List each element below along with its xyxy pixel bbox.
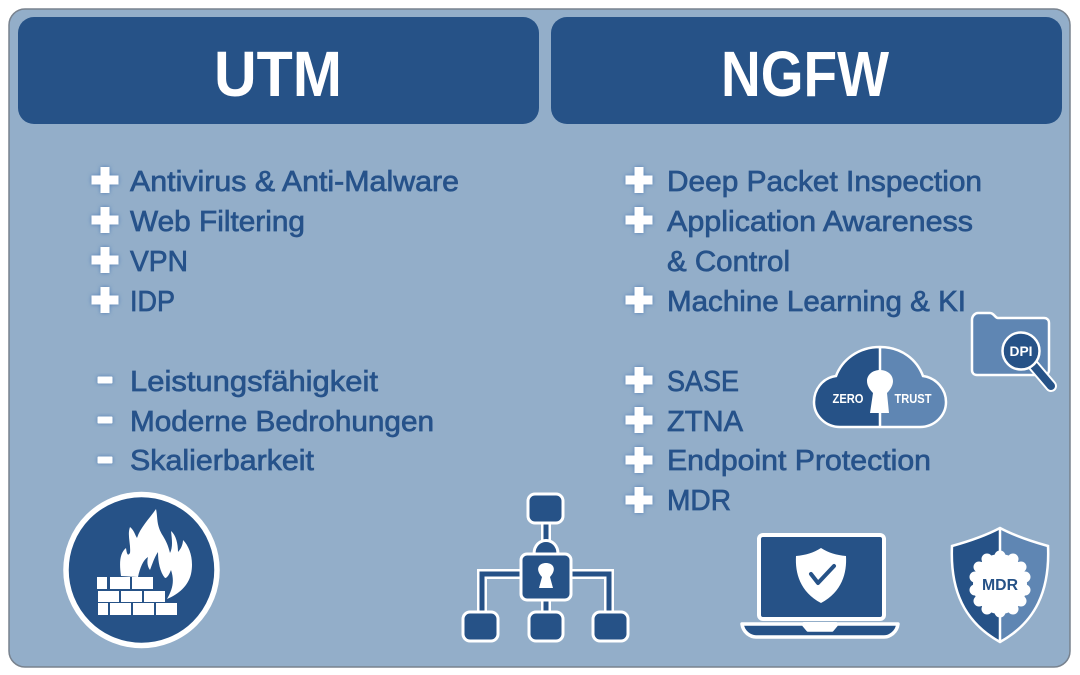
heading: UTM (18, 17, 539, 124)
list: UTM disadvantages: Skalierbarkeit (130, 445, 314, 477)
list: UTM disadvantages: Leistungsfähigkeit (130, 366, 378, 398)
icon: firewall (66, 494, 217, 646)
list: NGFW core features (626, 166, 982, 318)
list: UTM advantages: IDP (130, 286, 175, 318)
icon: MDR shield (952, 528, 1048, 642)
list: NGFW extended features: Endpoint Protection (667, 445, 931, 477)
list: NGFW extended features: MDR (667, 485, 731, 517)
list: NGFW extended features (626, 366, 931, 517)
list: NGFW core features: Machine Learning & KI (667, 286, 966, 318)
heading: NGFW (551, 17, 1062, 124)
list: NGFW core features: Application Awareness (667, 206, 973, 238)
icon: network lock (463, 494, 628, 641)
list: UTM disadvantages: Moderne Bedrohungen (130, 406, 434, 438)
icon: zero trust cloud (814, 347, 946, 427)
list: UTM advantages: Web Filtering (130, 206, 305, 238)
icon: MDR shield: MDR (982, 577, 1018, 594)
list: UTM disadvantages (98, 366, 434, 477)
icon: DPI folder with magnifier: DPI (1010, 343, 1032, 359)
list: UTM advantages: Antivirus & Anti-Malware (130, 166, 459, 198)
icon: laptop with shield (742, 535, 898, 637)
heading: UTM: UTM (214, 38, 342, 110)
list: NGFW extended features: SASE (667, 366, 739, 398)
list: NGFW core features: Deep Packet Inspection (667, 166, 982, 198)
list: NGFW core features: & Control (667, 246, 790, 278)
list: UTM advantages (92, 166, 459, 318)
list: NGFW extended features: ZTNA (667, 406, 744, 438)
heading: NGFW: NGFW (721, 38, 890, 110)
icon: zero trust cloud: ZERO (832, 392, 864, 406)
icon: DPI folder with magnifier (972, 313, 1051, 386)
icon: zero trust cloud: TRUST (894, 392, 932, 406)
list: UTM advantages: VPN (130, 246, 188, 278)
